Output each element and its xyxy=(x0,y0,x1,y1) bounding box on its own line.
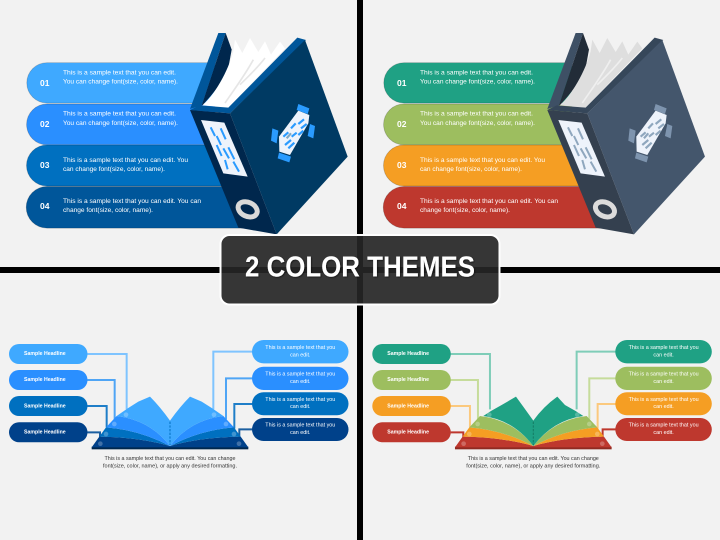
text pills: can edit. xyxy=(290,379,310,385)
text pills: can edit. xyxy=(653,379,674,385)
list row 04: 04 xyxy=(40,201,50,211)
list row 03: This is a sample text that you can edit. You xyxy=(63,157,189,164)
text pills: can edit. xyxy=(653,430,674,436)
text pills xyxy=(252,340,348,441)
text pills: This is a sample text that you xyxy=(629,345,699,351)
list row 04: This is a sample text that you can edit. You can xyxy=(420,198,559,205)
icon: blue binder xyxy=(190,33,348,234)
title banner xyxy=(220,235,500,304)
list row 01 xyxy=(27,63,215,103)
list row 02: 02 xyxy=(397,119,407,129)
list row 03: can change font(size, color, name). xyxy=(63,166,165,173)
text pills: This is a sample text that you xyxy=(265,345,335,351)
text pills: can edit. xyxy=(290,404,310,410)
list row 03: 03 xyxy=(397,160,407,170)
list row 02: This is a sample text that you can edit. xyxy=(63,111,176,118)
text pills: can edit. xyxy=(290,430,310,436)
list row 01: 01 xyxy=(40,78,50,88)
caption xyxy=(466,456,600,470)
list row 04: This is a sample text that you can edit. You can xyxy=(63,198,202,205)
list row 03: 03 xyxy=(40,160,50,170)
list row 04 xyxy=(383,186,602,228)
text pills: can edit. xyxy=(290,352,310,358)
list row 02 xyxy=(27,104,215,145)
caption: This is a sample text that you can edit. You can change xyxy=(468,456,599,462)
connector lines xyxy=(451,352,616,437)
headline pills: Sample Headline xyxy=(387,430,429,436)
text pills: This is a sample text that you xyxy=(629,423,699,429)
list row 01: 01 xyxy=(397,78,407,88)
list row 02: 02 xyxy=(40,119,50,129)
list row 02: You can change font(size, color, name). xyxy=(63,120,178,127)
list row 02: You can change font(size, color, name). xyxy=(420,120,535,127)
headline pills: Sample Headline xyxy=(24,377,66,383)
caption: font(size, color, name), or apply any desired formatting. xyxy=(103,464,237,470)
panel: multicolor binder theme xyxy=(383,33,705,234)
text pills xyxy=(615,340,712,441)
icon: slate binder xyxy=(547,33,705,234)
list row 04: change font(size, color, name). xyxy=(420,207,510,214)
headline pills: Sample Headline xyxy=(387,377,429,383)
headline pills xyxy=(372,344,451,442)
text pills: This is a sample text that you xyxy=(265,423,335,429)
headline pills xyxy=(9,344,88,442)
text pills: This is a sample text that you xyxy=(265,397,335,403)
list row 01 xyxy=(384,63,572,103)
text pills: This is a sample text that you xyxy=(629,372,699,378)
caption xyxy=(103,456,237,470)
list row 03 xyxy=(383,145,585,186)
headline pills: Sample Headline xyxy=(24,404,66,410)
text pills: can edit. xyxy=(653,404,674,410)
icon: open book xyxy=(92,397,248,449)
headline pills: Sample Headline xyxy=(387,404,429,410)
list row 03: This is a sample text that you can edit. You xyxy=(420,157,546,164)
list row 01: This is a sample text that you can edit. xyxy=(420,70,533,76)
list row 04 xyxy=(26,186,245,228)
headline pills: Sample Headline xyxy=(24,351,66,357)
text pills: can edit. xyxy=(653,352,674,358)
list row 02 xyxy=(384,104,572,145)
caption: font(size, color, name), or apply any desired formatting. xyxy=(466,464,600,470)
list row 01: This is a sample text that you can edit. xyxy=(63,70,176,76)
text pills: This is a sample text that you xyxy=(265,372,335,378)
list row 01: You can change font(size, color, name). xyxy=(63,78,178,86)
headline pills: Sample Headline xyxy=(387,351,429,357)
headline pills: Sample Headline xyxy=(24,430,66,436)
panel: blue open book theme xyxy=(9,340,348,470)
connector lines xyxy=(87,352,252,437)
text pills: This is a sample text that you xyxy=(629,397,699,403)
list row 03: can change font(size, color, name). xyxy=(420,166,522,173)
list row 04: 04 xyxy=(397,201,407,211)
list row 01: You can change font(size, color, name). xyxy=(420,78,535,86)
list row 03 xyxy=(26,145,228,186)
panel: blue binder theme xyxy=(26,33,348,234)
caption: This is a sample text that you can edit. You can change xyxy=(104,456,236,462)
list row 04: change font(size, color, name). xyxy=(63,207,153,214)
icon: open book xyxy=(455,397,612,449)
panel: multicolor open book theme xyxy=(372,340,712,470)
list row 02: This is a sample text that you can edit. xyxy=(420,111,533,118)
title banner: 2 COLOR THEMES xyxy=(245,252,475,284)
